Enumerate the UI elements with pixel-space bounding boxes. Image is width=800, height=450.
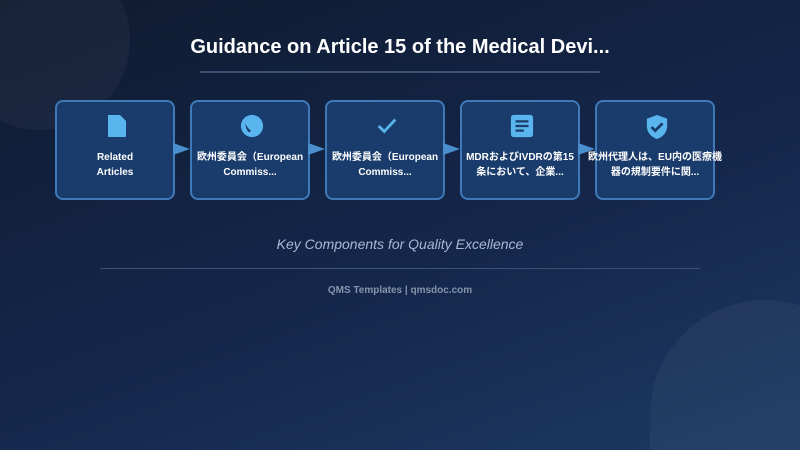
icon: globe [240,114,264,138]
step 5: 欧州代理人は、EU内の医療機 [588,152,722,163]
title: Guidance on Article 15 of the Medical Devi... [190,36,610,58]
step 3: 欧州委員会（European [332,152,438,163]
step 3 [325,100,445,200]
step 1: Related Articles: Related [97,152,133,163]
icon: check [378,118,396,134]
arrow 4 [578,143,595,155]
step 2: Commiss... [223,167,277,178]
step 2 [190,100,310,200]
icon: document [108,115,126,137]
subtitle: Key Components for Quality Excellence [277,236,523,252]
footer: QMS Templates | qmsdoc.com [328,285,472,296]
arrow 3 [443,143,460,155]
step 3: Commiss... [358,167,412,178]
icon: shield check [646,115,668,139]
step 1: Related Articles [55,100,175,200]
icon: text document [510,114,534,138]
step 4: MDRおよびIVDRの第15 [466,152,574,163]
step 1: Related Articles: Articles [97,167,133,178]
step 4 [460,100,580,200]
step 2: 欧州委員会（European [197,152,303,163]
step 5: 器の規制要件に関... [611,167,699,178]
arrow 1 [173,143,190,155]
arrow 2 [308,143,325,155]
step 4: 条において、企業... [476,167,564,178]
step 5 [595,100,715,200]
